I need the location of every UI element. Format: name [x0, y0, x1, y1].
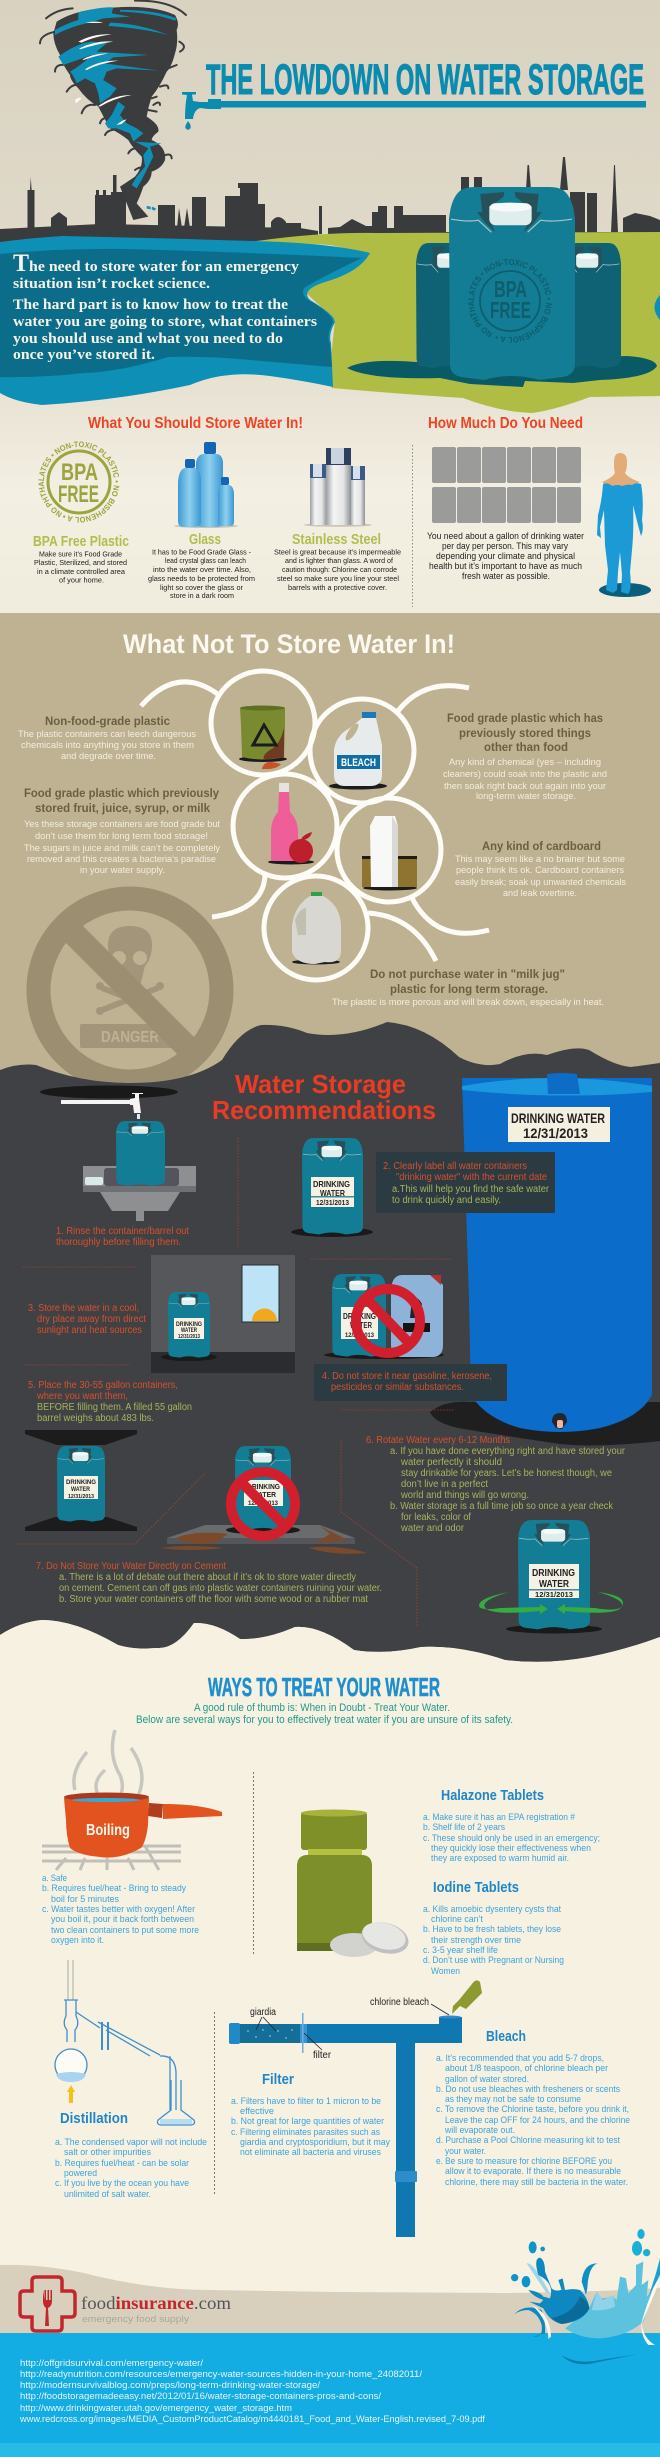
panel: step 3 cool dry place: WATER [181, 1328, 197, 1334]
panel: step 6 rotate water: 6. Rotate Water every 6-12 Months [366, 1435, 510, 1446]
panel: glass: into the water over time. Also, [153, 565, 251, 574]
panel: filter and bleach pipe: a. It’s recommended that you add 5-7 drops, [436, 2053, 604, 2063]
panel: distillation: unlimited of salt water. [64, 2189, 151, 2199]
panel: step 3 cool dry place: dry place away from direct [37, 1314, 146, 1325]
intro text: you should use and what you need to do [13, 331, 283, 347]
panel: glass: store in a dark room [170, 591, 234, 600]
panel: distillation: Distillation [60, 2110, 128, 2127]
panel: step 2 label: WATER [320, 1188, 345, 1198]
heading: water storage recommendations [212, 1069, 436, 1125]
panel: step 4 not near gasoline: DRINKING [343, 1312, 376, 1321]
hero jerrycans with BPA stamp: NO PHTHALATES • NON-TOXIC PLASTIC • NO BISPHENOL A • [468, 259, 552, 343]
intro text: The hard part is to know how to treat the [13, 297, 288, 313]
panel: step 2 label [291, 1138, 555, 1237]
callout: filter [304, 2033, 332, 2061]
panel: step 6 rotate water: 12/31/2013 [535, 1590, 573, 1599]
icon: BPA free badge: BPA [61, 459, 98, 486]
intro text: water you are going to store, what containers [13, 314, 317, 330]
panel: step 7 not on cement: 12/31/2013 [248, 1501, 279, 1507]
panel: filter and bleach pipe: d. Purchase a Pool Chlorine measuring kit to test [436, 2135, 620, 2145]
panel: step 1 rinse: thoroughly before filling them. [56, 1237, 181, 1248]
panel: step 4 not near gasoline: WATER [350, 1321, 372, 1330]
panel: tablets: Halazone Tablets [441, 1787, 544, 1804]
icon: bleach bottle: BLEACH [341, 757, 376, 769]
text block: source URLs: http://readynutrition.com/resources/emergency-water-sources-hidden-in-your-home_24082011/ [20, 2369, 422, 2380]
heading: how much do you need: How Much Do You Need [428, 415, 583, 432]
panel: stainless steel [274, 448, 401, 592]
panel: step 7 not on cement: DRINKING [247, 1482, 280, 1491]
logo: foodinsurance.com [20, 2277, 231, 2331]
text block: cardboard: This may seem like a no brainer but some [455, 854, 625, 865]
footer: tan wave [0, 2265, 660, 2340]
panel: BPA free plastic: of your home. [59, 576, 104, 584]
text block: non-food-grade plastic: and degrade over time. [61, 751, 156, 762]
icon: no danger sign with skull [38, 898, 222, 1082]
panel: glass: glass needs to be protected from [148, 574, 255, 583]
text block: cardboard: people think its ok. Cardboard containers [456, 865, 624, 876]
panel: stainless steel: Stainless Steel [292, 531, 381, 548]
icon: pipe [229, 1980, 482, 2237]
intro text: he need to store water for an emergency [29, 259, 300, 275]
panel: glass: It has to be Food Grade Glass - [152, 548, 251, 556]
icon: milk carton and cardboard box [362, 816, 417, 890]
text block: previously stored things other than food: previously stored things [459, 726, 591, 740]
text block: previously stored things other than food: cleaners) could soak into the plastic and [443, 769, 607, 780]
panel: filter and bleach pipe: as they may not be safe to consume [445, 2094, 581, 2104]
panel: step 7 not on cement [36, 1446, 382, 1605]
panel: filter and bleach pipe: c. To remove the Chlorine taste, before you drink it, [436, 2104, 629, 2114]
skyline [0, 157, 660, 245]
logo: foodinsurance.com: emergency food supply [82, 2314, 190, 2324]
callout: chlorine bleach [370, 1997, 449, 2015]
panel: step 5 place containers: 5. Place the 30-55 gallon containers, [28, 1380, 178, 1391]
panel: step 2 label: DRINKING [313, 1179, 350, 1189]
panel: stainless steel: barrels with a protective cover. [288, 583, 387, 592]
panel: stainless steel: and is lighter than glass. A word of [285, 556, 394, 565]
panel: glass: lead crystal glass can leach [165, 556, 246, 565]
tornado [40, 1, 186, 220]
background: cream treatment panel [0, 1620, 660, 2340]
icon: no danger sign with skull: DANGER [101, 1029, 159, 1046]
text block: fruit, juice, syrup, milk: The sugars in juice and milk can’t be completely [24, 843, 220, 854]
icon: bleach bottle [329, 712, 387, 790]
panel: step 6 rotate water: stay drinkable for years. Let’s be honest though, we [401, 1468, 612, 1479]
text block: source URLs: www.redcross.org/images/MEDIA_CustomProductCatalog/m4440181_Food_and_Water-English.revised_7-09.pdf [19, 2414, 485, 2425]
blue dot at right edge [654, 295, 660, 320]
panel: step 2 label: a.This will help you find the safe water [392, 1184, 550, 1195]
text block: fruit, juice, syrup, milk [24, 786, 220, 876]
text block: cardboard: easily break; soak up unwanted chemicals [455, 877, 626, 888]
panel: tablets: b. Shelf life of 2 years [423, 1822, 505, 1832]
panel: distillation: c. If you live by the ocean you have [55, 2178, 189, 2188]
background: tan panel [0, 613, 660, 1093]
panel: step 5 place containers: BEFORE filling them. A filled 55 gallon [37, 1402, 192, 1413]
text block: cardboard: and leak overtime. [503, 888, 577, 899]
background: dark recommendations panel [0, 1022, 660, 1662]
panel: step 5 place containers: 12/31/2013 [68, 1494, 94, 1500]
panel: filter and bleach pipe: about 1/8 teaspoon, of chlorine bleach per [445, 2063, 608, 2073]
text block: non-food-grade plastic: Non-food-grade plastic [45, 714, 170, 728]
hero jerrycans with BPA stamp [347, 187, 657, 387]
text block: previously stored things other than food [443, 711, 607, 802]
green field [257, 232, 660, 413]
panel: step 7 not on cement: 7. Do Not Store Your Water Directly on Cement [36, 1561, 226, 1572]
hero jerrycans with BPA stamp: BPA [494, 276, 527, 302]
panel: stainless steel: steel so make sure you line your steel [277, 574, 399, 583]
panel: filter and bleach pipe: b. Do not use bleaches with fresheners or scents [436, 2084, 620, 2094]
panel: boiling: you boil it, pour it back forth between [51, 1914, 194, 1924]
water: river [0, 236, 370, 405]
heading: what you should store water in: What You Should Store Water In! [88, 415, 303, 432]
text block: previously stored things other than food: other than food [484, 740, 568, 754]
panel: step 6 rotate water [366, 1435, 626, 1634]
panel: boiling: a. Safe [42, 1873, 67, 1883]
title [182, 56, 646, 130]
panel: rings of unsafe containers [141, 671, 489, 980]
text block: milk jug plastic: The plastic is more porous and will break down, especially in heat. [332, 997, 604, 1008]
panel: filter and bleach pipe: gallon of water stored. [445, 2074, 529, 2084]
callout: filter: filter [313, 2050, 332, 2061]
panel: filter and bleach pipe: effective [240, 2106, 274, 2116]
panel: step 3 cool dry place: 12/31/2013 [178, 1334, 200, 1340]
panel: large blue barrel: 12/31/2013 [523, 1125, 588, 1141]
panel: step 5 place containers: barrel weighs about 483 lbs. [37, 1413, 154, 1424]
panel: filter and bleach pipe: your water. [445, 2146, 486, 2156]
text block: fruit, juice, syrup, milk: stored fruit, juice, syrup, or milk [35, 801, 210, 815]
panel: boiling: two clean containers to put some more [51, 1925, 199, 1935]
intro text: situation isn’t rocket science. [13, 276, 210, 292]
text block: milk jug plastic: Do not purchase water in "milk jug" [370, 967, 565, 981]
panel: step 7 not on cement: on cement. Cement can off gas into plastic water containers ruining your water. [59, 1583, 382, 1594]
text block: previously stored things other than food: long-term water storage. [476, 791, 576, 802]
panel: tablets: d. Don’t use with Pregnant or Nursing [423, 1955, 564, 1965]
callout: chlorine bleach: chlorine bleach [370, 1997, 429, 2008]
icon: distillation apparatus [55, 1960, 194, 2125]
heading: ways to treat your water: A good rule of thumb is: When in Doubt - Treat Your Water. [194, 1702, 450, 1714]
panel: filter and bleach pipe: c. Filtering eliminates parasites such as [231, 2127, 380, 2137]
text block: milk jug plastic: plastic for long term storage. [390, 982, 548, 996]
panel: filter and bleach pipe: Leave the cap OFF for 24 hours, and the chlorine [445, 2115, 630, 2125]
panel: step 2 label: to drink quickly and easily. [392, 1195, 501, 1206]
panel: distillation [55, 1960, 207, 2199]
panel: step 6 rotate water: water perfectly it should [400, 1457, 502, 1468]
icon: BPA free badge: FREE [58, 481, 99, 508]
panel: how much do you need: depending your climate and physical [436, 551, 575, 561]
panel: step 2 label: 12/31/2013 [316, 1200, 349, 1207]
panel: step 7 not on cement: WATER [252, 1490, 277, 1499]
text block: previously stored things other than food: Food grade plastic which has [447, 711, 603, 725]
panel: tablets: b. Have to be fresh tablets, they lose [423, 1924, 561, 1934]
icon: green plastic bucket [239, 706, 287, 769]
panel: how much do you need: fresh water as possible. [462, 571, 550, 581]
text block: source URLs: http://modernsurvivalblog.com/preps/long-term-drinking-water-storage/ [20, 2380, 320, 2391]
panel: glass [148, 442, 255, 600]
panel: stainless steel: caution though: Chlorine can corrode [282, 565, 397, 574]
panel: filter and bleach pipe: b. Not great for large quantities of water [231, 2116, 384, 2126]
heading: ways to treat your water: WAYS TO TREAT YOUR WATER [208, 1672, 440, 1702]
panel: step 6 rotate water: DRINKING [532, 1568, 575, 1579]
panel: tablets: a. Make sure it has an EPA registration # [423, 1812, 576, 1822]
text block: source URLs [19, 2358, 485, 2425]
panel: step 6 rotate water: b. Water storage is a full time job so once a year check [390, 1501, 614, 1512]
text block: cardboard: Any kind of cardboard [482, 839, 601, 853]
panel: large blue barrel: DRINKING WATER [511, 1110, 605, 1126]
panel: boiling [42, 1730, 222, 1945]
chart: gray water containers grid [432, 447, 581, 523]
panel: stainless steel: Steel is great because it’s impermeable [274, 548, 401, 556]
panel: step 7 not on cement: b. Store your water containers off the floor with some wood or a rubber mat [59, 1594, 368, 1605]
text block: non-food-grade plastic: chemicals into anything you store in them [21, 740, 194, 751]
panel: filter and bleach pipe: Filter [262, 2071, 294, 2088]
panel: step 4 not near gasoline [314, 1274, 507, 1401]
text block: previously stored things other than food: Any kind of chemical (yes – including [449, 757, 601, 768]
title pipe with faucet [182, 92, 646, 130]
panel: tablets: they are exposed to warm humid air. [431, 1853, 569, 1863]
logo: foodinsurance.com: foodinsurance.com [81, 2293, 231, 2313]
hero jerrycans with BPA stamp: FREE [490, 297, 531, 323]
text block: fruit, juice, syrup, milk: removed and this creates a bacteria’s paradise [27, 854, 216, 865]
panel: filter and bleach pipe: giardia and cryptosporidium, but it may [240, 2137, 390, 2147]
panel: boiling: boil for 5 minutes [51, 1894, 119, 1904]
background: top paper [0, 0, 660, 614]
icon: person filled with water [597, 453, 651, 597]
panel: how much do you need: You need about a gallon of drinking water [427, 531, 584, 541]
icon: BPA free badge: NO PHTHALATES • NON-TOXIC PLASTIC • NO BISPHENOL A • [38, 441, 120, 523]
panel: step 1 rinse [40, 1086, 196, 1248]
heading: ways to treat your water: Below are several ways for you to effectively treat water if you are unsure of its safety. [136, 1714, 513, 1726]
panel: distillation: b. Requires fuel/heat - can be solar [55, 2158, 189, 2168]
panel: BPA free plastic [33, 441, 129, 584]
intro text: T [13, 250, 29, 277]
panel: tablets: Women [431, 1966, 460, 1976]
panel: step 6 rotate water: a. If you have done everything right and have stored your [390, 1446, 626, 1457]
panel: step 5 place containers: DRINKING [66, 1479, 96, 1486]
icon: green rotate arrows [479, 1592, 623, 1614]
panel: step 5 place containers [25, 1380, 192, 1531]
text block: fruit, juice, syrup, milk: Yes these storage containers are food grade but [24, 819, 220, 830]
panel: step 4 not near gasoline: pesticides or similar substances. [331, 1382, 464, 1393]
panel: step 3 cool dry place: DRINKING [176, 1322, 202, 1328]
panel: glass: Glass [189, 531, 221, 548]
panel: boiling: Boiling [86, 1822, 130, 1839]
intro text [13, 250, 317, 363]
panel: tablets: c. These should only be used in an emergency; [423, 1833, 600, 1843]
callout: giardia [250, 2007, 276, 2031]
icon: milk jug [292, 892, 341, 964]
panel: boiling: b. Requires fuel/heat - Bring to steady [42, 1883, 186, 1893]
panel: BPA free plastic: Plastic, Sterilized, and stored [34, 558, 127, 567]
heading: water storage recommendations: Water Storage [235, 1069, 406, 1099]
panel: step 3 cool dry place: 3. Store the water in a cool, [28, 1303, 139, 1314]
panel: step 6 rotate water: WATER [539, 1579, 570, 1590]
panel: filter and bleach pipe [229, 1980, 630, 2237]
panel: step 4 not near gasoline: 12/31/2013 [345, 1332, 374, 1339]
text block: source URLs: http://foodstoragemadeeasy.net/2012/01/16/water-storage-containers-pros-and-cons/ [20, 2391, 381, 2402]
callout: giardia: giardia [250, 2007, 276, 2018]
icon: tablet bottle with pills [297, 1810, 412, 1959]
text block: milk jug plastic [332, 967, 604, 1008]
panel: distillation: a. The condensed vapor will not include [55, 2137, 207, 2147]
panel: filter and bleach pipe: a. Filters have to filter to 1 micron to be [231, 2096, 381, 2106]
panel: step 6 rotate water: for leaks, color of [401, 1512, 471, 1523]
panel: filter and bleach pipe: allow it to evaporate. If there is no measurable [445, 2166, 621, 2176]
panel: step 2 label: "drinking water" with the current date [396, 1172, 547, 1183]
text block: source URLs: http://www.drinkingwater.utah.gov/emergency_water_storage.htm [20, 2403, 292, 2414]
panel: tablets: their strength over time [431, 1935, 521, 1945]
icon: pink bottle with apple [268, 783, 314, 864]
panel: step 5 place containers: WATER [71, 1486, 90, 1493]
panel: step 6 rotate water: don’t live in a perfect [401, 1479, 488, 1490]
panel: step 5 place containers: where you want them, [36, 1391, 128, 1402]
panel: step 6 rotate water: world and things will go wrong. [400, 1490, 529, 1501]
panel: filter and bleach pipe: e. Be sure to measure for chlorine BEFORE you [436, 2156, 612, 2166]
panel: tablets: a. Kills amoebic dysentery cysts that [423, 1904, 561, 1914]
panel: BPA free plastic: in a climate controlled area [37, 567, 126, 576]
panel: BPA free plastic: BPA Free Plastic [33, 533, 129, 550]
heading: ways to treat your water [136, 1672, 513, 1726]
panel: BPA free plastic: Make sure it’s Food Grade [39, 550, 122, 558]
panel: how much do you need [427, 447, 651, 597]
panel: distillation: powered [64, 2168, 97, 2178]
footer: water band [0, 2333, 660, 2443]
text block: fruit, juice, syrup, milk: Food grade plastic which previously [24, 786, 219, 800]
panel: boiling: c. Water tastes better with oxygen! After [42, 1904, 195, 1914]
panel: how much do you need: per day per person. This may vary [442, 541, 568, 551]
text block: fruit, juice, syrup, milk: in your water supply. [80, 865, 165, 876]
panel: tablets: Iodine Tablets [433, 1879, 519, 1896]
heading: water storage recommendations: Recommendations [212, 1095, 436, 1125]
text block: non-food-grade plastic [18, 714, 196, 762]
panel: tablets [297, 1787, 600, 1976]
panel: tablets: c. 3-5 year shelf life [423, 1945, 498, 1955]
panel: filter and bleach pipe: Bleach [486, 2028, 526, 2045]
panel: step 3 cool dry place [28, 1255, 295, 1373]
panel: how much do you need: health but it’s important to have as much [429, 561, 582, 571]
text block: cardboard [455, 839, 626, 899]
text block: previously stored things other than food: then soak right back out again into your [444, 781, 606, 792]
text block: non-food-grade plastic: The plastic containers can leech dangerous [18, 729, 196, 740]
panel: step 4 not near gasoline: 4. Do not store it near gasoline, kerosene, [322, 1371, 492, 1382]
panel: boiling: oxygen into it. [51, 1935, 104, 1945]
panel: filter and bleach pipe: chlorine, there may still be bacteria in the water. [445, 2177, 628, 2187]
panel: distillation: salt or other impurities [64, 2147, 151, 2157]
text block: fruit, juice, syrup, milk: don’t use them for long term food storage! [35, 831, 208, 842]
icon: glass bottles [174, 442, 238, 528]
panel: glass: light so cover the glass or [160, 583, 243, 592]
panel: tablets: they quickly lose their effectiveness when [431, 1843, 591, 1853]
panel: step 7 not on cement: a. There is a lot of debate out there about if it’s ok to store water directly [59, 1572, 356, 1583]
panel: tablets: chlorine can’t [431, 1914, 483, 1924]
panel: step 1 rinse: 1. Rinse the container/barrel out [56, 1226, 189, 1237]
heading: what not to store water in: What Not To Store Water In! [123, 629, 455, 659]
icon: steel cylinders [304, 448, 372, 527]
icon: water splash [511, 2229, 660, 2364]
panel: filter and bleach pipe: not eliminate all bacteria and viruses [240, 2147, 381, 2157]
text block: source URLs: http://offgridsurvival.com/emergency-water/ [20, 2358, 203, 2369]
panel: large blue barrel [430, 1073, 660, 1445]
panel: step 2 label: 2. Clearly label all water containers [383, 1161, 527, 1172]
panel: filter and bleach pipe: will evaporate out. [444, 2125, 515, 2135]
intro text: once you’ve stored it. [13, 347, 155, 363]
panel: step 6 rotate water: water and odor [400, 1523, 465, 1534]
panel: step 3 cool dry place: sunlight and heat sources [37, 1325, 142, 1336]
